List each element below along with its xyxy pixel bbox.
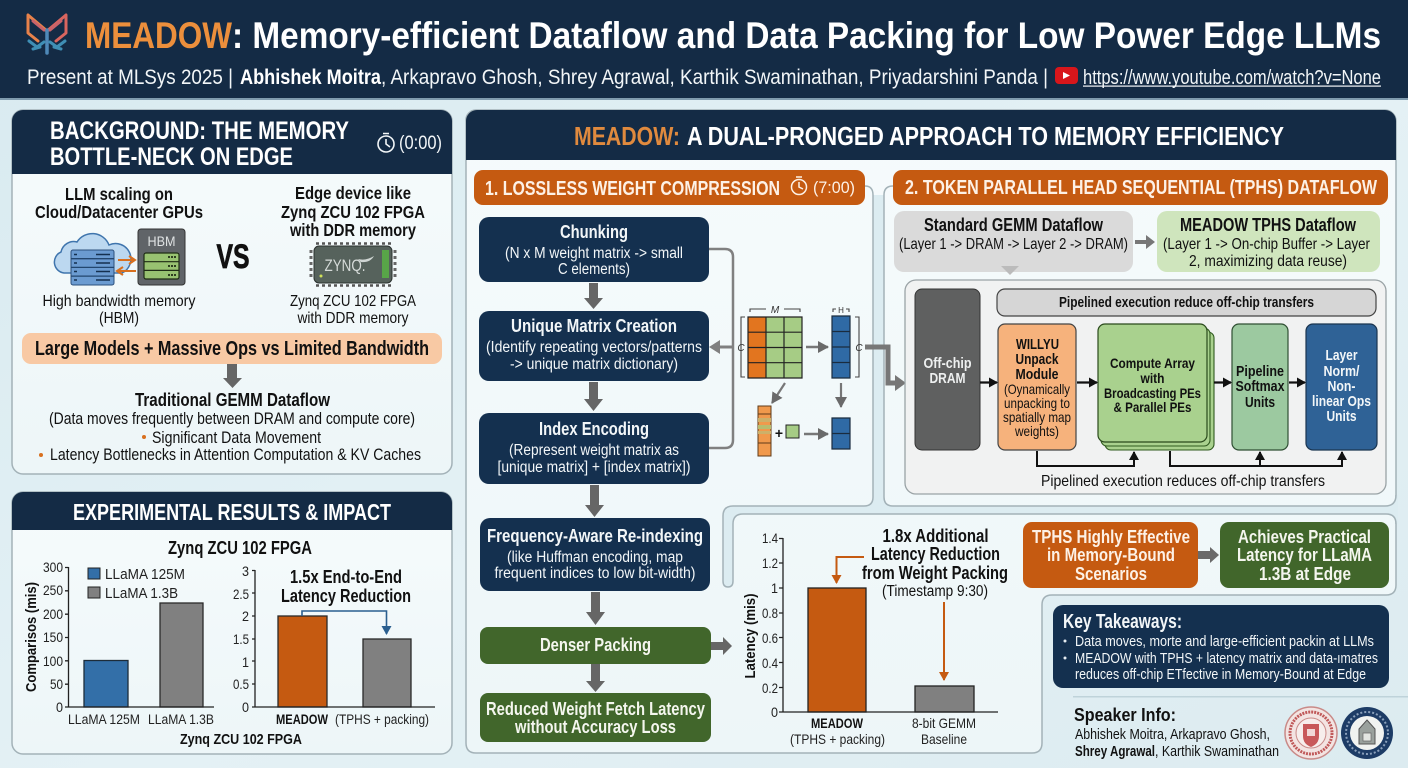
bar chart: model comparison: 300 <box>43 559 63 575</box>
arrow: reduction <box>302 611 386 634</box>
bar chart: end-to-end latency: (TPHS + packing) <box>335 712 429 727</box>
reduced column <box>832 418 850 449</box>
title: MEADOW <box>85 15 232 56</box>
annotation: weight packing: 1.8x Additional <box>882 526 988 546</box>
subtitle: venue and authors: , Arkapravo Ghosh, Shrey Agrawal, Karthik Swaminathan, Priyadarshini Panda | <box>381 66 1048 89</box>
diagram: weight matrix decomposition <box>737 305 863 456</box>
block: compute array <box>1098 324 1214 450</box>
arrow: to reduced column <box>840 383 842 407</box>
panel: key takeaways: Data moves, morte and large-efficient packin at LLMs <box>1075 634 1374 650</box>
panel header: results <box>12 492 452 530</box>
legend <box>88 567 185 602</box>
y axis label: Comparisos (mis) <box>23 582 40 692</box>
flow step: index encoding: Index Encoding <box>539 419 649 439</box>
bar chart: weight packing latency: 0.4 <box>762 655 778 671</box>
bar chart: end-to-end latency <box>233 563 435 727</box>
bar chart: end-to-end latency: 1.5 <box>233 631 249 647</box>
block: off-chip DRAM: DRAM <box>930 370 966 387</box>
bar chart: weight packing latency: 0.2 <box>762 680 778 696</box>
card: MEADOW TPHS: 2, maximizing data reuse) <box>1189 253 1347 270</box>
arrow: to index stack <box>772 383 785 403</box>
text block: traditional dataflow: Significant Data Movement <box>152 429 321 447</box>
unique column <box>832 306 863 378</box>
flow step: re-indexing <box>480 518 710 591</box>
heading: cloud GPUs <box>35 184 203 222</box>
card: MEADOW TPHS <box>1157 211 1380 272</box>
icon: MEADOW logo <box>28 15 66 53</box>
heading: edge device: with DDR memory <box>289 220 416 240</box>
annotation: reduction: 1.5x End-to-End <box>290 566 402 587</box>
heading: edge device <box>281 183 425 240</box>
bar chart: weight packing latency: 1.2 <box>762 555 778 571</box>
bar: MEADOW <box>278 616 327 707</box>
flow step: unique matrix: -> unique matrix dictionary) <box>510 356 678 373</box>
panel header: approach: A DUAL-PRONGED APPROACH TO MEMORY EFFICIENCY <box>687 121 1284 151</box>
panel: key takeaways <box>1053 605 1389 688</box>
block: layer norm: Layer <box>1326 347 1358 364</box>
caption: HBM: (HBM) <box>99 310 139 327</box>
callout: practical latency <box>1220 522 1389 588</box>
flow step: reduced latency: without Accuracy Loss <box>514 717 676 737</box>
bar chart: weight packing latency: 0.6 <box>762 630 778 646</box>
arrow: to reduced column <box>804 433 828 435</box>
block: unpack module <box>998 324 1076 450</box>
flow step: denser packing: Denser Packing <box>540 635 651 655</box>
flow step: chunking: C elements) <box>558 261 630 278</box>
flow step: index encoding: [unique matrix] + [index matrix]) <box>498 459 690 476</box>
flow step: reduced latency <box>480 693 711 742</box>
index stack <box>758 406 771 456</box>
block: unpack module: unpacking to <box>1004 395 1070 411</box>
block: compute array: Compute Array <box>1110 355 1195 371</box>
annotation: weight packing: (Timestamp 9:30) <box>882 583 988 600</box>
panel: key takeaways: reduces off-chip ETfective in Memory-Bound at Edge <box>1075 667 1366 683</box>
y axis label: Latency (mis) <box>742 594 759 678</box>
block: layer norm: Units <box>1326 408 1356 425</box>
flow step: index encoding <box>479 413 709 484</box>
text block: traditional dataflow: (Data moves frequently between DRAM and compute core) <box>49 410 415 428</box>
callout: practical latency: Latency for LLaMA <box>1237 545 1372 565</box>
card: MEADOW TPHS: (Layer 1 -> On-chip Buffer -> Layer <box>1163 236 1371 253</box>
panel header: results: EXPERIMENTAL RESULTS & IMPACT <box>73 499 391 525</box>
icon: university seal navy <box>1341 707 1393 759</box>
block: compute array: with <box>1140 370 1164 386</box>
card: standard GEMM: Standard GEMM Dataflow <box>924 215 1104 235</box>
block: unpack module: spatially map <box>1003 409 1071 425</box>
panel header: approach <box>466 110 1396 160</box>
bar chart: model comparison: 0 <box>56 699 63 715</box>
block: softmax units: Pipeline <box>1236 363 1284 380</box>
flow step: denser packing <box>480 627 711 664</box>
annotation: weight packing: Latency Reduction <box>871 544 1000 564</box>
bar chart: model comparison: 250 <box>43 582 63 598</box>
icon: stopwatch <box>378 134 394 152</box>
block: softmax units <box>1232 324 1288 450</box>
chart title: Zynq ZCU 102 FPGA <box>168 538 312 558</box>
block: unpack module: weights) <box>1014 423 1059 439</box>
heading: cloud GPUs: Cloud/Datacenter GPUs <box>35 202 203 222</box>
panel header: background: BACKGROUND: THE MEMORY <box>50 117 349 145</box>
block: unpack module: Module <box>1016 366 1058 383</box>
bar: LLaMA 1.3B <box>160 603 203 707</box>
bar chart: model comparison: LLaMA 1.3B <box>148 712 214 727</box>
text block: traditional dataflow: Traditional GEMM Dataflow <box>135 390 331 410</box>
arrow: down <box>584 382 603 411</box>
card: MEADOW TPHS: MEADOW TPHS Dataflow <box>1180 215 1357 235</box>
legend: LLaMA 125M <box>105 567 185 583</box>
section heading: weight compression: 1. LOSSLESS WEIGHT COMPRESSION <box>485 178 780 200</box>
bar chart: weight packing latency: (TPHS + packing) <box>790 731 885 747</box>
callout: TPHS effective <box>1023 522 1198 588</box>
text block: traditional dataflow: Latency Bottlenecks in Attention Computation & KV Caches <box>50 446 421 464</box>
card: standard GEMM: (Layer 1 -> DRAM -> Layer 2 -> DRAM) <box>899 236 1128 253</box>
flow step: index encoding: (Represent weight matrix as <box>509 442 679 459</box>
section heading: weight compression <box>474 170 865 205</box>
annotation: weight packing: from Weight Packing <box>862 563 1008 583</box>
flow step: re-indexing: frequent indices to low bit-width) <box>494 565 696 582</box>
caption: HBM: High bandwidth memory <box>42 293 196 310</box>
panel header: approach: MEADOW: <box>574 121 680 151</box>
heading: cloud GPUs: LLM scaling on <box>65 184 173 204</box>
bar chart: model comparison: 100 <box>43 653 63 669</box>
bar chart: end-to-end latency: 2.5 <box>233 586 249 602</box>
block: off-chip DRAM: Off-chip <box>924 355 972 372</box>
panel header: background: BOTTLE-NECK ON EDGE <box>50 143 293 171</box>
bar chart: end-to-end latency: 0.5 <box>233 676 249 692</box>
bar chart: model comparison: 50 <box>50 676 63 692</box>
caption: pipelined execution: Pipelined execution reduces off-chip transfers <box>1041 473 1325 490</box>
block: layer norm: Norm/ <box>1324 363 1360 380</box>
flow step: chunking: Chunking <box>560 222 628 242</box>
icon: YouTube <box>1055 67 1078 84</box>
block: compute array: Broadcasting PEs <box>1104 385 1201 401</box>
block: unpack module: WILLYU <box>1016 336 1059 353</box>
subtitle: venue and authors: Present at MLSys 2025 | <box>27 66 233 89</box>
card: standard GEMM <box>894 211 1133 275</box>
bar chart: model comparison: 150 <box>43 629 63 645</box>
flow step: chunking <box>479 217 709 282</box>
bar chart: weight packing latency: 1 <box>771 580 778 596</box>
arrow: to unique column <box>806 346 828 348</box>
bar chart: weight packing latency <box>742 526 1008 747</box>
banner: pipelined execution: Pipelined execution reduce off-chip transfers <box>1059 295 1314 311</box>
caption: FPGA: with DDR memory <box>297 310 408 327</box>
panel header: background <box>12 110 452 174</box>
section heading: TPHS <box>893 170 1388 205</box>
gutter between sub-panels <box>723 195 1398 587</box>
panel: background <box>12 110 452 474</box>
speaker info: Abhishek Moitra, Arkapravo Ghosh, <box>1075 727 1270 743</box>
plus sign: + <box>775 425 783 441</box>
arrow: to practical latency <box>1198 547 1219 563</box>
bar: TPHS plus packing <box>363 639 411 707</box>
heading: edge device: Edge device like <box>295 183 411 203</box>
arrow: down <box>585 485 604 517</box>
arrow: down <box>584 283 603 309</box>
bar: 8-bit GEMM baseline <box>915 686 974 712</box>
caption: FPGA: Zynq ZCU 102 FPGA <box>290 293 416 310</box>
arrow: down <box>586 664 605 692</box>
callout: practical latency: 1.3B at Edge <box>1259 564 1351 584</box>
block: compute array: & Parallel PEs <box>1114 399 1192 415</box>
block: softmax units: Units <box>1245 394 1275 411</box>
bar chart: weight packing latency: 1.4 <box>762 530 778 546</box>
icon: data exchange arrows <box>117 256 136 275</box>
bar chart: weight packing latency: MEADOW <box>811 715 864 731</box>
bar chart: model comparison: LLaMA 125M <box>68 712 140 727</box>
bar: MEADOW <box>808 588 866 712</box>
subtitle: venue and authors: Abhishek Moitra <box>240 66 381 89</box>
callout: TPHS effective: TPHS Highly Effective <box>1032 527 1190 547</box>
callout: TPHS effective: Scenarios <box>1075 564 1147 584</box>
icon: Zynq FPGA chip <box>311 244 395 286</box>
banner: pipelined execution <box>997 289 1376 316</box>
panel: experimental results <box>12 492 452 754</box>
callout: constraint <box>22 333 442 364</box>
icon: HBM module <box>138 229 185 285</box>
speaker info <box>1074 705 1279 760</box>
annotation: weight packing <box>862 526 1008 600</box>
block: softmax units: Softmax <box>1236 378 1285 395</box>
legend: LLaMA 1.3B <box>105 586 178 602</box>
bar chart: end-to-end latency: 3 <box>242 563 249 579</box>
header banner <box>0 0 1408 100</box>
diagram: accelerator pipeline <box>905 280 1386 494</box>
subtitle: venue and authors <box>27 66 1048 89</box>
unique column: H <box>838 306 844 315</box>
bar chart: model comparison <box>23 559 214 727</box>
VS label: VS <box>216 238 250 276</box>
section heading: weight compression: (7:00) <box>813 178 855 197</box>
bar: LLaMA 125M <box>84 660 128 707</box>
icon: HBM module: HBM <box>148 233 176 249</box>
block: layer norm: Non- <box>1328 378 1356 395</box>
chart caption: Zynq ZCU 102 FPGA <box>180 731 302 748</box>
panel: key takeaways: Key Takeaways: <box>1063 611 1182 633</box>
arrow: to chart <box>711 637 732 655</box>
bracket connector <box>709 249 733 448</box>
block: off-chip DRAM <box>915 289 980 450</box>
block: unpack module: Unpack <box>1016 351 1059 368</box>
bar chart: weight packing latency: 8-bit GEMM <box>912 715 976 731</box>
bar chart: end-to-end latency: MEADOW <box>276 712 328 727</box>
heading: edge device: Zynq ZCU 102 FPGA <box>281 202 425 222</box>
bar chart: end-to-end latency: 2 <box>242 608 249 624</box>
arrow: to TPHS <box>1135 235 1155 249</box>
flow step: re-indexing: (like Huffman encoding, map <box>507 549 683 566</box>
bar chart: weight packing latency: Baseline <box>921 731 967 747</box>
callout: TPHS effective: in Memory-Bound <box>1047 545 1175 565</box>
block: layer norm: linear Ops <box>1312 393 1371 410</box>
bar chart: model comparison: 200 <box>43 606 63 622</box>
annotation: reduction <box>281 566 411 606</box>
annotation: reduction: Latency Reduction <box>281 585 411 606</box>
text block: traditional dataflow <box>39 390 421 464</box>
bar chart: end-to-end latency: 0 <box>242 699 249 715</box>
unique element square <box>786 425 799 438</box>
panel: MEADOW approach <box>466 110 1398 753</box>
timestamp: (0:00) <box>399 133 442 154</box>
caption: FPGA <box>290 293 416 327</box>
flow step: unique matrix: (Identify repeating vectors/patterns <box>486 339 702 356</box>
flow step: unique matrix <box>479 311 709 381</box>
icon: Zynq FPGA chip: ZYNQ. <box>324 256 366 275</box>
arrow: to MEADOW bar <box>836 557 864 583</box>
bar chart: end-to-end latency: 1 <box>242 654 249 670</box>
speaker info: , Karthik Swaminathan <box>1155 744 1279 760</box>
callout: practical latency: Achieves Practical <box>1238 527 1371 547</box>
icon: cloud servers <box>54 234 131 285</box>
weight matrix <box>737 305 802 378</box>
arrow: down <box>586 592 605 625</box>
arrows: pipeline stages <box>980 381 1305 384</box>
arrow: to baseline bar <box>943 602 945 680</box>
flow step: reduced latency: Reduced Weight Fetch Latency <box>486 699 705 719</box>
caption: HBM <box>42 293 196 327</box>
flow step: re-indexing: Frequency-Aware Re-indexing <box>487 526 703 546</box>
arrow: into dataflow <box>865 347 897 383</box>
block: layer norm <box>1306 324 1377 450</box>
block: unpack module: (Oynamically <box>1004 381 1070 397</box>
weight matrix: M <box>771 305 780 316</box>
bar chart: weight packing latency: 0 <box>771 704 778 720</box>
speaker info: Speaker Info: <box>1074 705 1176 725</box>
speaker info: Shrey Agrawal <box>1075 744 1155 760</box>
flow step: unique matrix: Unique Matrix Creation <box>511 316 677 336</box>
icon: university seal red <box>1285 707 1337 759</box>
flow step: chunking: (N x M weight matrix -> small <box>505 245 683 262</box>
unique column: C <box>855 343 863 354</box>
bar chart: weight packing latency: 0.8 <box>762 605 778 621</box>
callout: constraint: Large Models + Massive Ops vs Limited Bandwidth <box>35 338 429 360</box>
weight matrix: C <box>737 343 745 354</box>
arrow: down <box>223 364 242 388</box>
arrows: feedback connectors <box>1037 451 1342 466</box>
icon: stopwatch <box>792 177 806 194</box>
